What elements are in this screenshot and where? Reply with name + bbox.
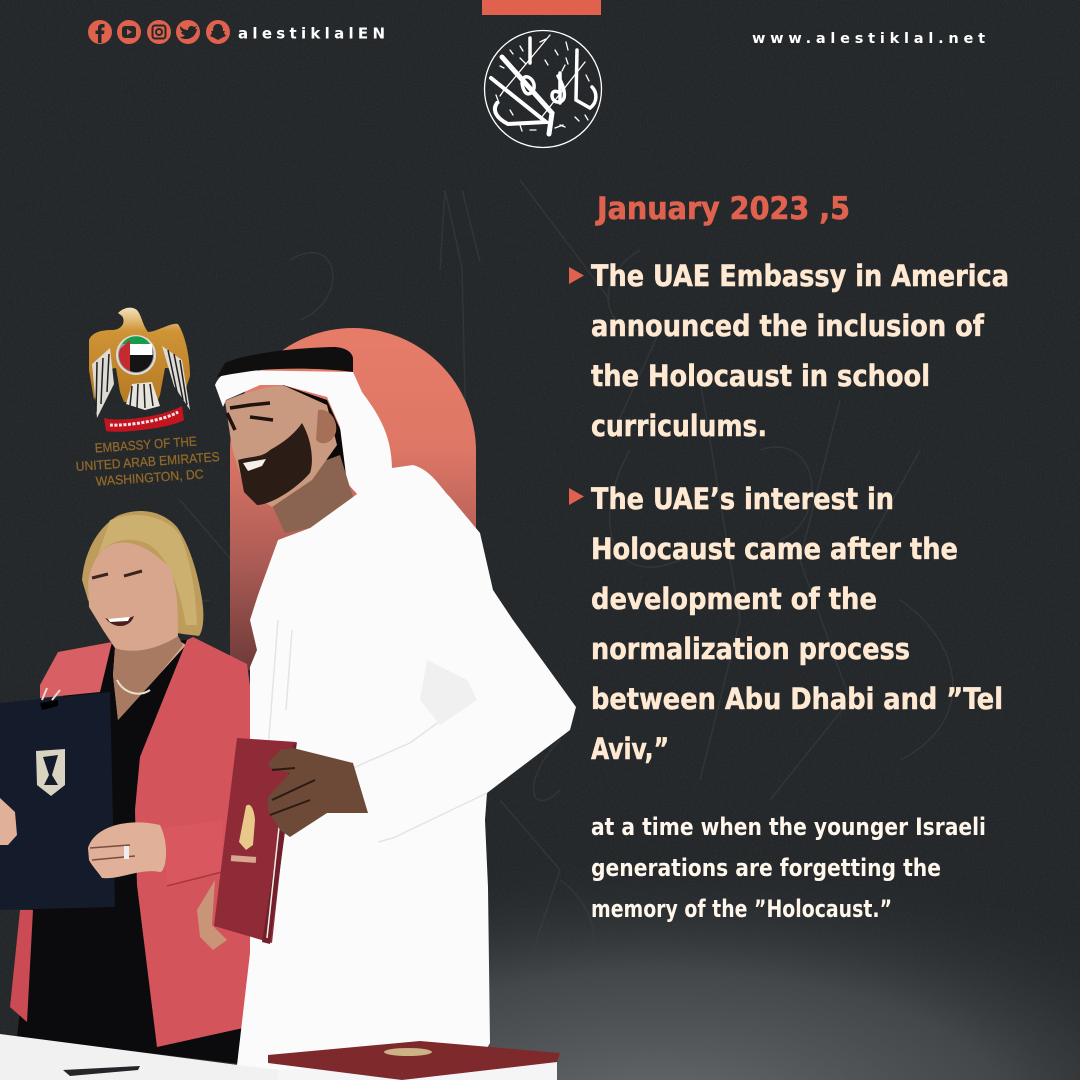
icon: Israeli emblem [36,749,65,796]
face and neck [88,543,186,720]
photo: woman [0,511,252,1064]
UAE embassy emblem [75,308,220,489]
logo: calligraphic roundel [484,30,602,148]
robe folds [268,620,487,842]
photo: man [215,347,576,1080]
hair [283,385,351,490]
salmon arch [230,328,476,670]
black top [17,640,243,1064]
black folder [0,692,115,910]
text: normalization: Aviv,” [591,732,669,766]
icon: folder crest [239,805,255,850]
eye and brow [227,403,273,430]
icon: facebook [88,20,112,44]
jacket sleeve [163,820,223,888]
closing paragraph: at a time when the younger Israeli [591,813,986,841]
text: normalization: normalization process [591,632,910,666]
red folder [214,738,297,944]
man's hands [197,748,368,950]
smile [243,459,266,471]
jacket left lapel [40,642,112,698]
icon: twitter [176,20,200,44]
woman's hands [88,822,166,878]
text: normalization: development of the [591,582,877,616]
ear [316,410,336,443]
icon: bullet arrow [569,267,584,284]
closing paragraph [591,813,986,923]
text: normalization: The UAE’s interest in [591,482,894,516]
pen [63,1066,140,1076]
top accent bar [482,0,601,15]
bullet point one [569,259,1009,443]
icon: eagle [89,308,190,432]
text: embassy announcement: the Holocaust in school [591,359,930,393]
icon: bullet arrow two [569,488,584,505]
text: embassy announcement: announced the inclusion of [591,309,985,343]
neck [272,455,353,533]
text: normalization: Holocaust came after the [591,532,958,566]
folder on table [268,1041,560,1080]
embassy caption: WASHINGTON, DC [95,466,204,489]
closing paragraph: memory of the ”Holocaust.” [591,895,892,923]
social icons and handle [88,20,385,44]
ghutra [215,370,392,500]
closing paragraph: generations are forgetting the [591,854,941,882]
website url: www.alestiklal.net [752,31,985,47]
date heading: January 2023 ,5 [595,191,850,227]
jacket hem [10,910,33,1022]
table [0,1034,280,1080]
embassy caption: UNITED ARAB EMIRATES [75,449,220,474]
agal headband [217,347,353,377]
icon: youtube [117,20,141,44]
neck shadow [113,636,183,720]
robe [236,465,576,1080]
jacket [135,637,252,1047]
icon: instagram [147,20,171,44]
face [225,386,337,507]
text: embassy announcement: curriculums. [591,409,767,443]
icon: crest [384,1048,432,1056]
social handle: alestiklalEN [238,24,385,42]
bullet point two [569,482,1003,766]
icon: snapchat [206,20,230,44]
embassy caption [75,433,220,489]
text: normalization [591,482,1003,766]
embassy caption: EMBASSY OF THE [94,433,197,456]
watermark calligraphy [156,180,953,969]
beard [238,423,312,505]
hair [82,511,203,636]
text: normalization: between Abu Dhabi and ”Tel [591,682,1003,716]
text: embassy announcement [591,259,1009,443]
text: embassy announcement: The UAE Embassy in America [591,259,1009,293]
